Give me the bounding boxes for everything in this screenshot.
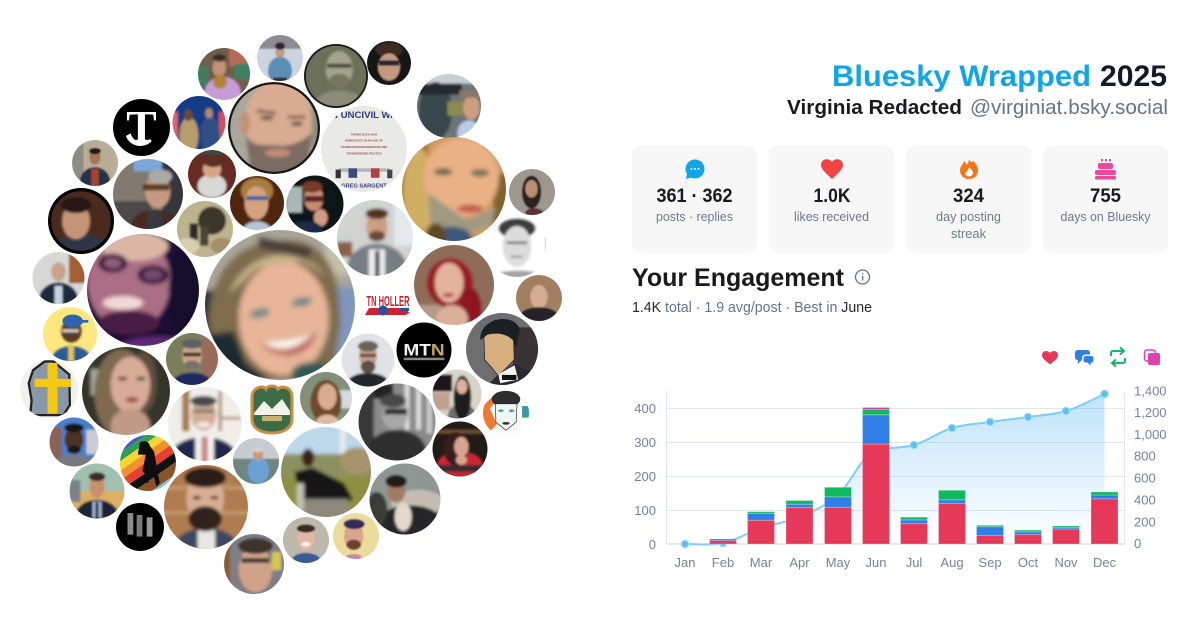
avatar: gray bearded man xyxy=(342,334,394,386)
stat label: streak xyxy=(951,226,986,241)
subtitle: name and handle: Virginia Redacted xyxy=(787,96,962,119)
avatar: book cover An Uncivil War: TAKING BACK OUR xyxy=(351,132,377,136)
right axis labels: 1,000 xyxy=(1134,427,1167,442)
month labels: Jul xyxy=(906,555,922,570)
stat label: days on Bluesky xyxy=(1060,209,1151,224)
left axis labels: 0 xyxy=(649,537,656,552)
stat label: day posting xyxy=(936,209,1001,224)
avatar: black and white man xyxy=(351,376,443,472)
chart legend xyxy=(1042,348,1160,366)
month labels: Dec xyxy=(1093,555,1117,570)
avatar: pencil sketch man xyxy=(496,217,546,277)
avatar: man in dark jacket xyxy=(32,252,84,304)
avatar: man in hoodie with buildings xyxy=(50,418,98,466)
avatar: man with black ring xyxy=(48,188,114,254)
month labels: Aug xyxy=(940,555,964,570)
avatar: smiling man in glasses xyxy=(166,333,218,385)
icon: legend reply xyxy=(1075,350,1094,366)
avatar: woman in red on news xyxy=(427,416,493,482)
subtitle: name and handle xyxy=(787,96,1168,119)
left axis labels: 100 xyxy=(634,503,656,518)
bar: Jul xyxy=(900,517,928,544)
left axis labels: 400 xyxy=(634,401,656,416)
avatar: blonde woman with scarf xyxy=(402,137,506,241)
month labels: May xyxy=(826,555,851,570)
bar: Apr xyxy=(786,500,813,544)
panel: days on Bluesky xyxy=(1043,145,1168,253)
right axis labels: 1,400 xyxy=(1134,384,1167,398)
avatar: brown haired woman xyxy=(295,367,357,429)
icon: legend repost xyxy=(1111,348,1125,366)
icon: legend quote xyxy=(1144,350,1160,365)
avatar: man with blue glasses xyxy=(230,176,284,230)
right axis labels: 200 xyxy=(1134,514,1156,530)
month labels: Apr xyxy=(789,555,810,570)
stat value: 361 · 362 xyxy=(656,186,732,207)
avatar: man in glasses bottom xyxy=(224,534,284,594)
panel: likes received xyxy=(769,145,894,253)
bar: Nov xyxy=(1052,526,1080,544)
avatar: NYT logo xyxy=(113,99,170,156)
grid lines xyxy=(666,391,1125,544)
panel: posts and replies xyxy=(632,145,757,253)
avatar: vintage camouflage picture xyxy=(177,201,233,257)
stat value: 755 xyxy=(1090,186,1121,207)
left axis labels: 200 xyxy=(634,469,656,484)
right axis labels: 0 xyxy=(1134,536,1141,551)
icon: birthday cake xyxy=(1095,159,1116,180)
cumulative area xyxy=(685,394,1104,545)
avatar: man in gray suit xyxy=(337,200,413,276)
avatar: red haired woman xyxy=(414,245,494,325)
avatar: book cover An Uncivil War: GREG SARGENT xyxy=(341,183,387,189)
right axis labels: 400 xyxy=(1134,492,1156,508)
avatar: man in blue shirt xyxy=(233,438,279,484)
right axis labels: 1,200 xyxy=(1134,405,1167,420)
month labels xyxy=(675,555,1117,570)
avatar: bald older man xyxy=(516,275,562,321)
avatar: man in red sweater xyxy=(72,140,118,186)
icon: flame xyxy=(960,159,978,179)
avatar: Asian woman long hair xyxy=(428,365,486,428)
avatar: W logo xyxy=(116,503,164,551)
stat label: likes received xyxy=(794,209,869,224)
title: 2025 xyxy=(1100,60,1167,93)
bar: Sep xyxy=(976,525,1004,544)
month labels: Mar xyxy=(750,555,773,570)
avatar: smiling man in blue xyxy=(278,512,334,568)
stacked bars xyxy=(710,408,1118,544)
avatar: bishop hat with yellow cross xyxy=(20,360,78,418)
avatar: two politicians shaking hands xyxy=(172,96,226,149)
avatar: MTN logo: MTN xyxy=(403,342,445,360)
left axis labels xyxy=(634,401,656,552)
avatar: NYT logo: T xyxy=(126,101,157,152)
logo: TN Holler xyxy=(365,294,410,316)
icon: green fist badge xyxy=(252,386,292,433)
avatar cluster xyxy=(20,30,567,600)
avatar: man with moose statue xyxy=(417,74,481,138)
subtitle: name and handle: @virginiat.bsky.social xyxy=(970,96,1168,119)
avatar: woman with long hair xyxy=(82,347,170,435)
icon: legend heart xyxy=(1042,351,1058,364)
right axis labels: 600 xyxy=(1134,470,1156,486)
cumulative line xyxy=(685,394,1104,545)
avatar: book cover An Uncivil War: AN UNCIVIL WAR xyxy=(324,110,405,120)
avatar: book cover An Uncivil War xyxy=(321,106,407,192)
avatar: cartoon man in blue cap xyxy=(43,307,97,361)
month labels: Jan xyxy=(675,555,695,570)
bar: May xyxy=(824,487,852,544)
panel: day posting streak xyxy=(906,145,1031,253)
icon: heart xyxy=(821,159,843,179)
avatar: Archer cartoon xyxy=(466,313,538,385)
avatar: cartoon face with orange stripes xyxy=(483,390,531,436)
avatar: man with capitol sunset xyxy=(70,464,124,518)
avatar: man with coconut xyxy=(198,48,250,100)
avatar: man in dark hoodie xyxy=(362,456,448,542)
avatar: bearded man on yellow xyxy=(328,508,384,564)
month labels: Nov xyxy=(1054,555,1078,570)
month labels: Oct xyxy=(1018,555,1038,570)
icon: chat bubble xyxy=(686,160,704,179)
bar: Dec xyxy=(1091,492,1118,544)
avatar: pastor with cross xyxy=(168,387,242,461)
heading: your engagement: Your Engagement xyxy=(632,264,845,292)
avatar: book cover An Uncivil War: DEMOCRACY IN AN AGE OF xyxy=(345,139,383,143)
avatar: man relaxing outdoors xyxy=(272,418,380,526)
bar: Aug xyxy=(938,490,966,544)
avatar: book cover An Uncivil War: THUNDERDOME POLITICS xyxy=(346,152,382,156)
avatar: main woman selfie xyxy=(205,230,355,380)
month labels: Sep xyxy=(978,555,1002,570)
bar: Feb xyxy=(710,539,736,544)
avatar: woman with red sunglasses xyxy=(286,176,344,232)
avatar: dark haired woman xyxy=(509,169,555,215)
right axis labels xyxy=(1134,384,1167,551)
bar: Mar xyxy=(748,512,774,544)
stat value: 1.0K xyxy=(814,186,851,207)
avatar: sepia bald man xyxy=(304,44,368,108)
bar: Oct xyxy=(1014,530,1042,544)
stat label xyxy=(936,209,1001,241)
avatar: child on sofa xyxy=(188,150,236,198)
logo: TN Holler: TN HOLLER xyxy=(366,294,410,310)
avatar: bald bearded man xyxy=(228,82,320,174)
icon: info xyxy=(856,270,870,284)
engagement chart xyxy=(634,384,1167,570)
stat label: posts · replies xyxy=(656,209,733,224)
avatar: book cover An Uncivil War: TRUMPIAN DISINFORMATION AND xyxy=(341,145,387,149)
month labels: Jun xyxy=(866,555,886,570)
bar: Jun xyxy=(862,408,890,544)
avatar: rainbow flag silhouette xyxy=(120,435,176,491)
stat value: 324 xyxy=(953,186,984,207)
left axis labels: 300 xyxy=(634,435,656,450)
avatar: man with sunglasses selfie xyxy=(113,159,183,229)
avatar: man with dark glasses xyxy=(367,41,411,85)
cumulative markers xyxy=(681,390,1108,548)
month labels: Feb xyxy=(712,555,734,570)
engagement summary: 1.4K total · 1.9 avg/post · Best in June xyxy=(632,300,872,316)
title: Bluesky Wrapped xyxy=(832,60,1091,93)
avatar: bearded man with brick wall xyxy=(164,465,248,549)
avatar: MTN logo xyxy=(396,322,452,378)
right axis labels: 800 xyxy=(1134,448,1156,464)
avatar: woman in snow xyxy=(257,35,303,81)
avatar: purple tinted man with glasses xyxy=(87,234,199,346)
